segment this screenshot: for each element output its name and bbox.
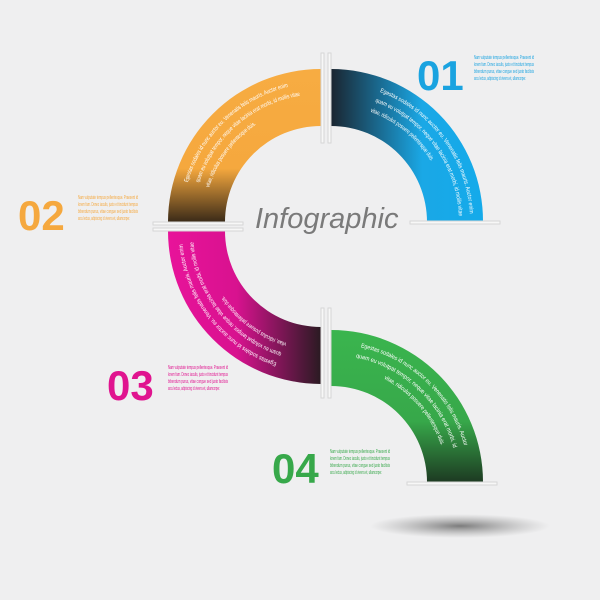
label 02: bibendum purus, vitae congue sed justo facilisis xyxy=(78,209,138,215)
label 02 xyxy=(18,192,138,239)
label 01: 01 xyxy=(417,52,464,99)
label 03: arcu lectus, adipiscing id viverra et, ullamcorper. xyxy=(168,386,220,392)
label 01: lorem fam. Donec iaculis, justo et tincidunt tempus xyxy=(474,62,534,68)
label 01 xyxy=(417,52,534,99)
arc: orange: Egestas sodales id nunc auctor eu. Venenatis felis mauris. Auctor enim xyxy=(184,84,288,182)
arc: orange: vitae, ridiculus posuere pellentesque duis. xyxy=(206,123,256,187)
arc: orange: quam eu volutpat tempor, neque vitae lacinia erat morbi, id mollis vitae xyxy=(196,92,300,182)
arc: green: quam eu volutpat tempor, neque vitae lacinia erat morbi, id xyxy=(356,354,458,448)
arc: magenta: quam eu volutpat tempor, neque vitae lacinia erat morbi, id mollis vitae xyxy=(190,242,282,356)
label 04: arcu lectus, adipiscing id viverra et, ullamcorper. xyxy=(330,470,382,476)
arc: orange xyxy=(168,69,320,222)
label 01: bibendum purus, vitae congue sed justo facilisis xyxy=(474,69,534,75)
arc: blue: quam eu volutpat tempor, neque vitae lacinia erat morbi, id mollis vitae xyxy=(376,99,463,216)
label 03: Nam vulputate tempus pellentesque. Praesent id xyxy=(168,365,228,371)
label 03 xyxy=(107,362,228,409)
label 01: arcu lectus, adipiscing id viverra et, ullamcorper. xyxy=(474,76,526,82)
arc: blue xyxy=(332,69,483,220)
arc: green: Egestas sodales id nunc auctor eu. Venenatis felis mauris. Auctor xyxy=(361,343,468,445)
arc: blue: vitae, ridiculus posuere pellentesque duis. xyxy=(371,108,433,161)
arc: magenta xyxy=(168,232,320,384)
label 04: bibendum purus, vitae congue sed justo facilisis xyxy=(330,463,390,469)
label 03: 03 xyxy=(107,362,154,409)
arc: magenta: vitae, ridiculus posuere pellentesque duis. xyxy=(222,296,286,346)
arc: magenta: Egestas sodales id nunc auctor eu. Venenatis felis mauris. Auctor enim xyxy=(178,244,276,366)
label 02: arcu lectus, adipiscing id viverra et, ullamcorper. xyxy=(78,216,130,222)
arc: green: vitae, ridiculus posuere pellentesque duis. xyxy=(384,376,444,446)
label 04: lorem fam. Donec iaculis, justo et tincidunt tempus xyxy=(330,456,390,462)
label 04: 04 xyxy=(272,445,319,492)
label 01: Nam vulputate tempus pellentesque. Praesent id xyxy=(474,55,534,61)
label 02: lorem fam. Donec iaculis, justo et tincidunt tempus xyxy=(78,202,138,208)
label 04 xyxy=(272,445,390,492)
shadow ellipse xyxy=(370,514,550,538)
label 03: bibendum purus, vitae congue sed justo facilisis xyxy=(168,379,228,385)
arc: green xyxy=(332,330,483,482)
label 02: Nam vulputate tempus pellentesque. Praesent id xyxy=(78,195,138,201)
label 04: Nam vulputate tempus pellentesque. Praesent id xyxy=(330,449,390,455)
title: Infographic xyxy=(255,203,399,235)
label 03: lorem fam. Donec iaculis, justo et tincidunt tempus xyxy=(168,372,228,378)
arc: blue: Egestas sodales id nunc auctor eu. Venenatis felis mauris. Auctor enim xyxy=(380,88,474,214)
label 02: 02 xyxy=(18,192,65,239)
